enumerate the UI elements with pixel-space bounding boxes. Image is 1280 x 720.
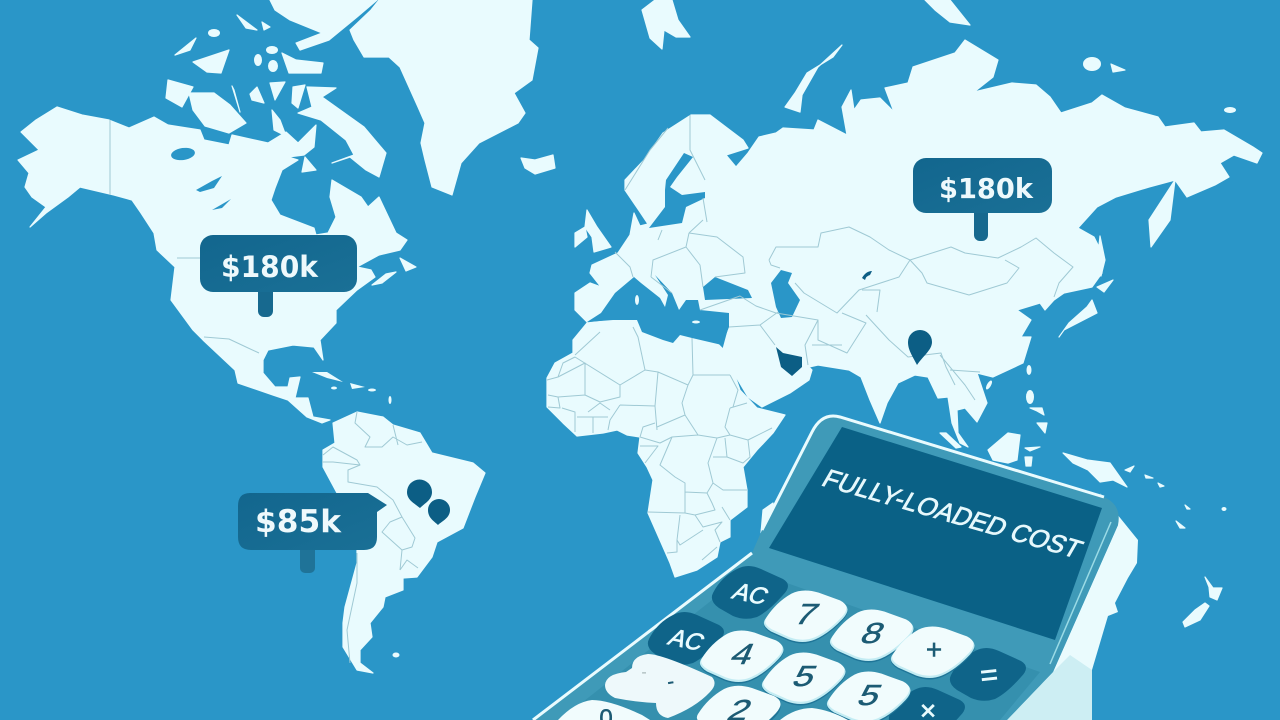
calculator rim	[533, 416, 1104, 720]
African borders	[547, 327, 772, 560]
calculator screen	[769, 427, 1102, 640]
key: bottom partial	[780, 708, 848, 720]
Iceland	[521, 155, 555, 174]
key: 7	[764, 590, 848, 644]
Africa	[547, 320, 785, 577]
key: 0 partial	[558, 700, 650, 720]
Eurasia	[575, 40, 1262, 447]
key: 5: 5	[787, 660, 822, 693]
key: multiply	[889, 687, 965, 720]
key: 5	[762, 652, 846, 706]
South America	[323, 412, 485, 673]
key: plus: +	[926, 634, 942, 665]
key: 8	[830, 609, 914, 662]
callout: North America $180k	[200, 235, 357, 317]
key: 4: 4	[725, 638, 760, 671]
keypad recess	[560, 570, 1040, 720]
pin: Brazil west	[407, 480, 432, 508]
callout: North America $180k: $180k	[221, 250, 319, 284]
North America	[18, 0, 416, 423]
key: equals	[950, 648, 1026, 701]
pin: Arabian Gulf	[776, 347, 802, 376]
South American borders	[322, 412, 422, 663]
islands of Eurasia	[575, 0, 1236, 627]
pin: Central Asia	[862, 271, 872, 280]
pins on the map	[407, 271, 932, 525]
key: 8: 8	[855, 617, 890, 650]
Caribbean islands	[312, 372, 392, 404]
key: AC lower: AC	[664, 625, 709, 656]
Greenland	[350, 0, 538, 195]
callout: South America $85k: $85k	[255, 504, 342, 540]
key: AC upper: AC	[728, 579, 773, 610]
callout: Asia $180k: $180k	[939, 172, 1034, 205]
screen text: FULLY-LOADED COST	[817, 464, 1088, 564]
key: 5 second	[827, 671, 911, 720]
key: AC upper	[712, 566, 788, 619]
callout: South America $85k	[238, 493, 387, 573]
keys	[558, 566, 1026, 720]
calculator	[533, 416, 1138, 720]
key: 2	[697, 686, 781, 720]
key: 4	[700, 630, 784, 684]
inland seas	[587, 153, 800, 345]
key: equals: =	[979, 658, 999, 693]
callout: Asia $180k	[913, 158, 1052, 241]
key: merged minus	[605, 654, 715, 718]
North American lakes and borders	[110, 120, 259, 353]
key: AC lower	[648, 612, 724, 665]
pin: Brazil east	[428, 499, 450, 525]
calculator side and Australia	[1007, 493, 1138, 720]
key: merged minus: -	[641, 664, 647, 681]
calculator body	[533, 416, 1119, 720]
Eurasian borders	[615, 115, 1073, 400]
key: 5 second: 5	[852, 679, 887, 712]
key: 7: 7	[789, 598, 824, 631]
key: merged minus: -	[665, 671, 676, 693]
pin: India	[908, 330, 932, 365]
key: plus	[891, 626, 975, 680]
